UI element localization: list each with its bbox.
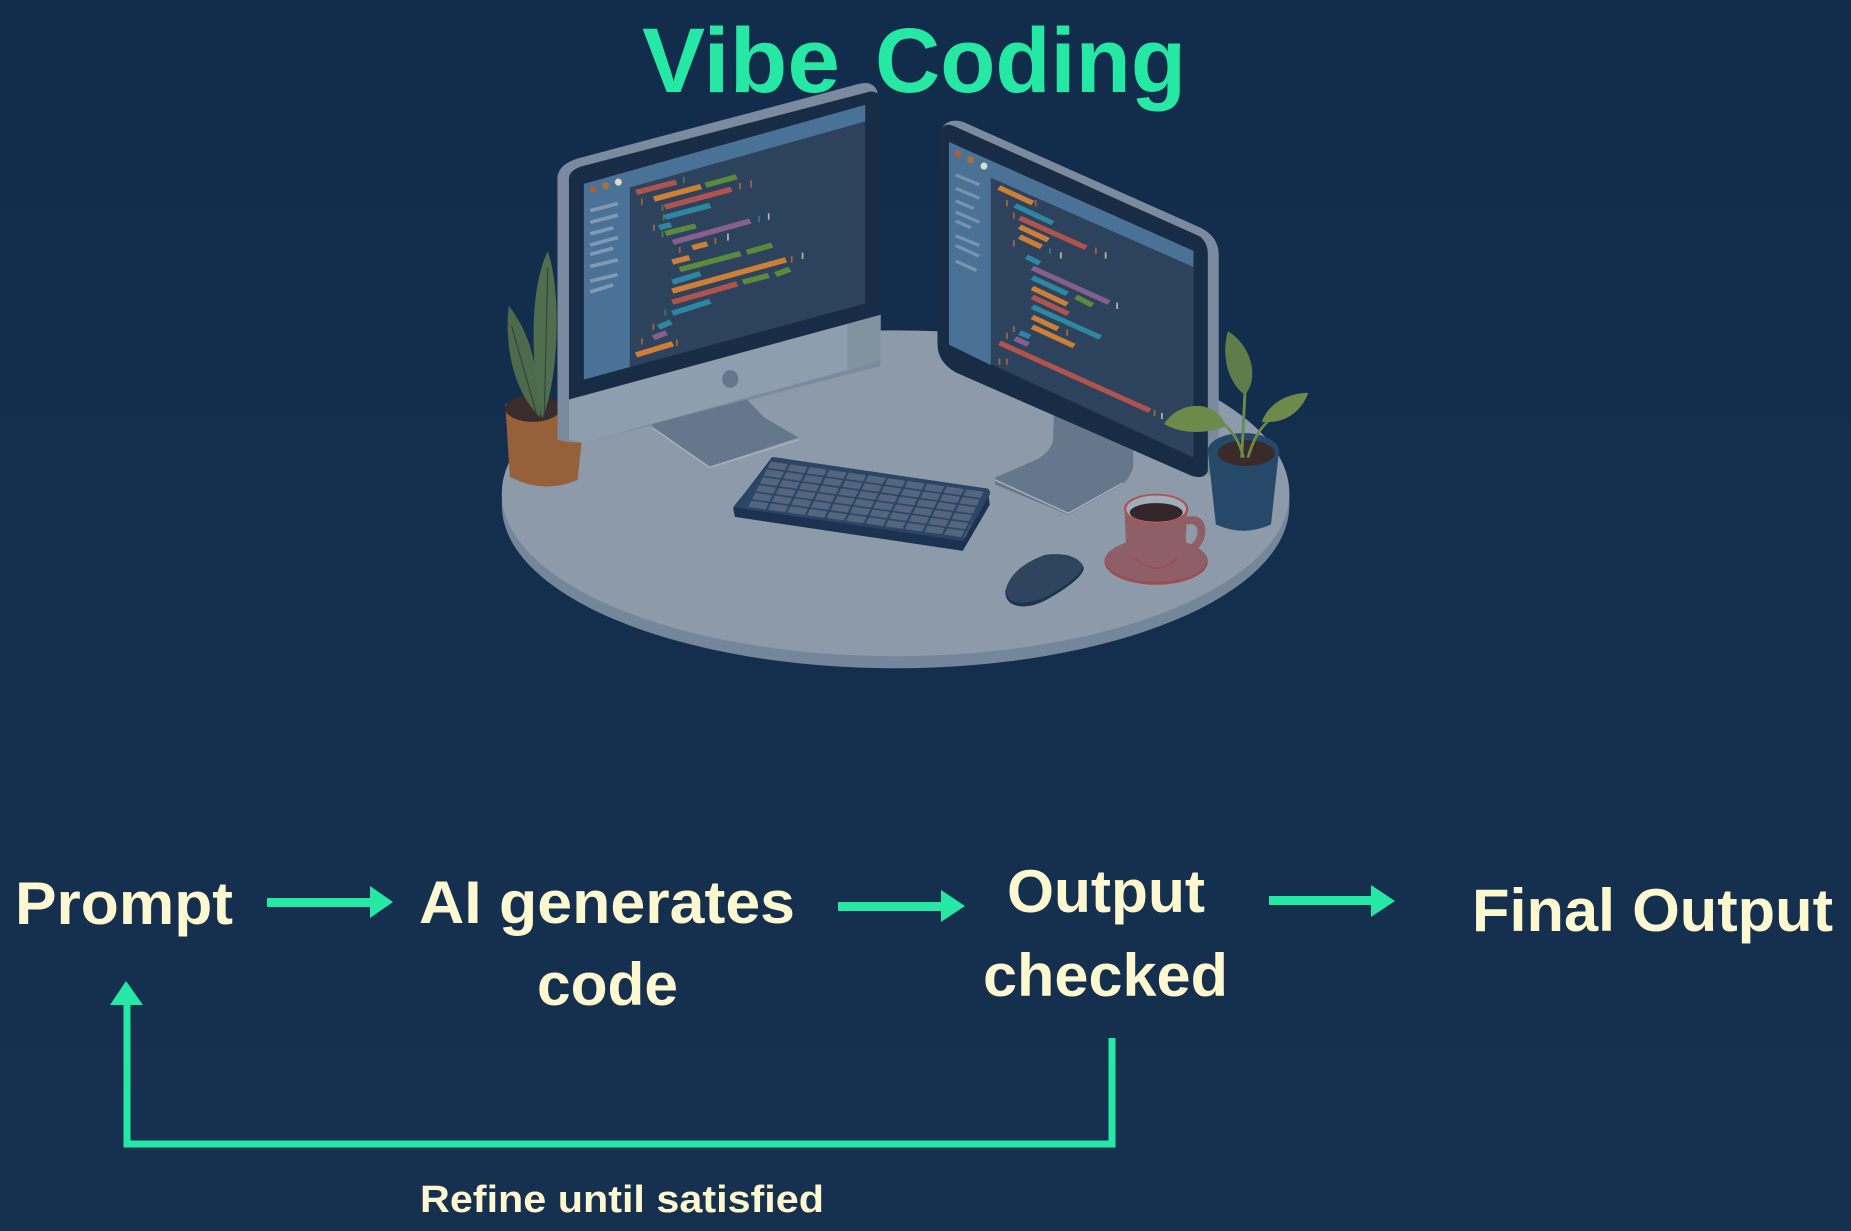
left screen sidebar lines bbox=[590, 204, 618, 292]
step: AI generates code: AI generates bbox=[419, 869, 795, 936]
right screen window dots bbox=[955, 150, 987, 170]
arrow: output to final bbox=[1269, 885, 1395, 917]
left screen code ticks bbox=[642, 177, 803, 346]
title: Vibe bbox=[642, 10, 840, 112]
left plant bbox=[505, 251, 582, 487]
arrow: AI to output bbox=[838, 890, 965, 922]
step: Output checked bbox=[983, 858, 1228, 1009]
right screen code lines bbox=[999, 187, 1150, 411]
right monitor stand bbox=[995, 413, 1133, 515]
right screen code ticks bbox=[999, 200, 1162, 419]
feedback arrow head bbox=[110, 981, 143, 1005]
step: Output checked: Output bbox=[1007, 858, 1205, 925]
step: Final Output: Final Output bbox=[1472, 877, 1833, 944]
keyboard bbox=[733, 457, 990, 551]
step: AI generates code bbox=[419, 869, 795, 1018]
title: Coding bbox=[875, 10, 1186, 112]
step: Prompt: Prompt bbox=[15, 870, 233, 937]
title bbox=[642, 10, 1186, 112]
feedback label: Refine until satisfied bbox=[420, 1179, 824, 1221]
left screen code lines bbox=[636, 177, 790, 355]
step: Output checked: checked bbox=[983, 942, 1228, 1009]
desk bbox=[502, 330, 1289, 668]
right screen sidebar lines bbox=[956, 175, 979, 271]
step: AI generates code: code bbox=[537, 951, 678, 1018]
mouse bbox=[1005, 554, 1084, 606]
right plant bbox=[1164, 331, 1308, 531]
left monitor bbox=[557, 83, 881, 467]
feedback loop arrow bbox=[127, 1003, 1112, 1144]
left screen window dots bbox=[590, 179, 622, 193]
illustration: desk with two monitors bbox=[502, 83, 1308, 668]
right monitor bbox=[937, 121, 1219, 477]
coffee cup and saucer bbox=[1105, 495, 1208, 585]
arrow: prompt to AI bbox=[267, 886, 393, 918]
